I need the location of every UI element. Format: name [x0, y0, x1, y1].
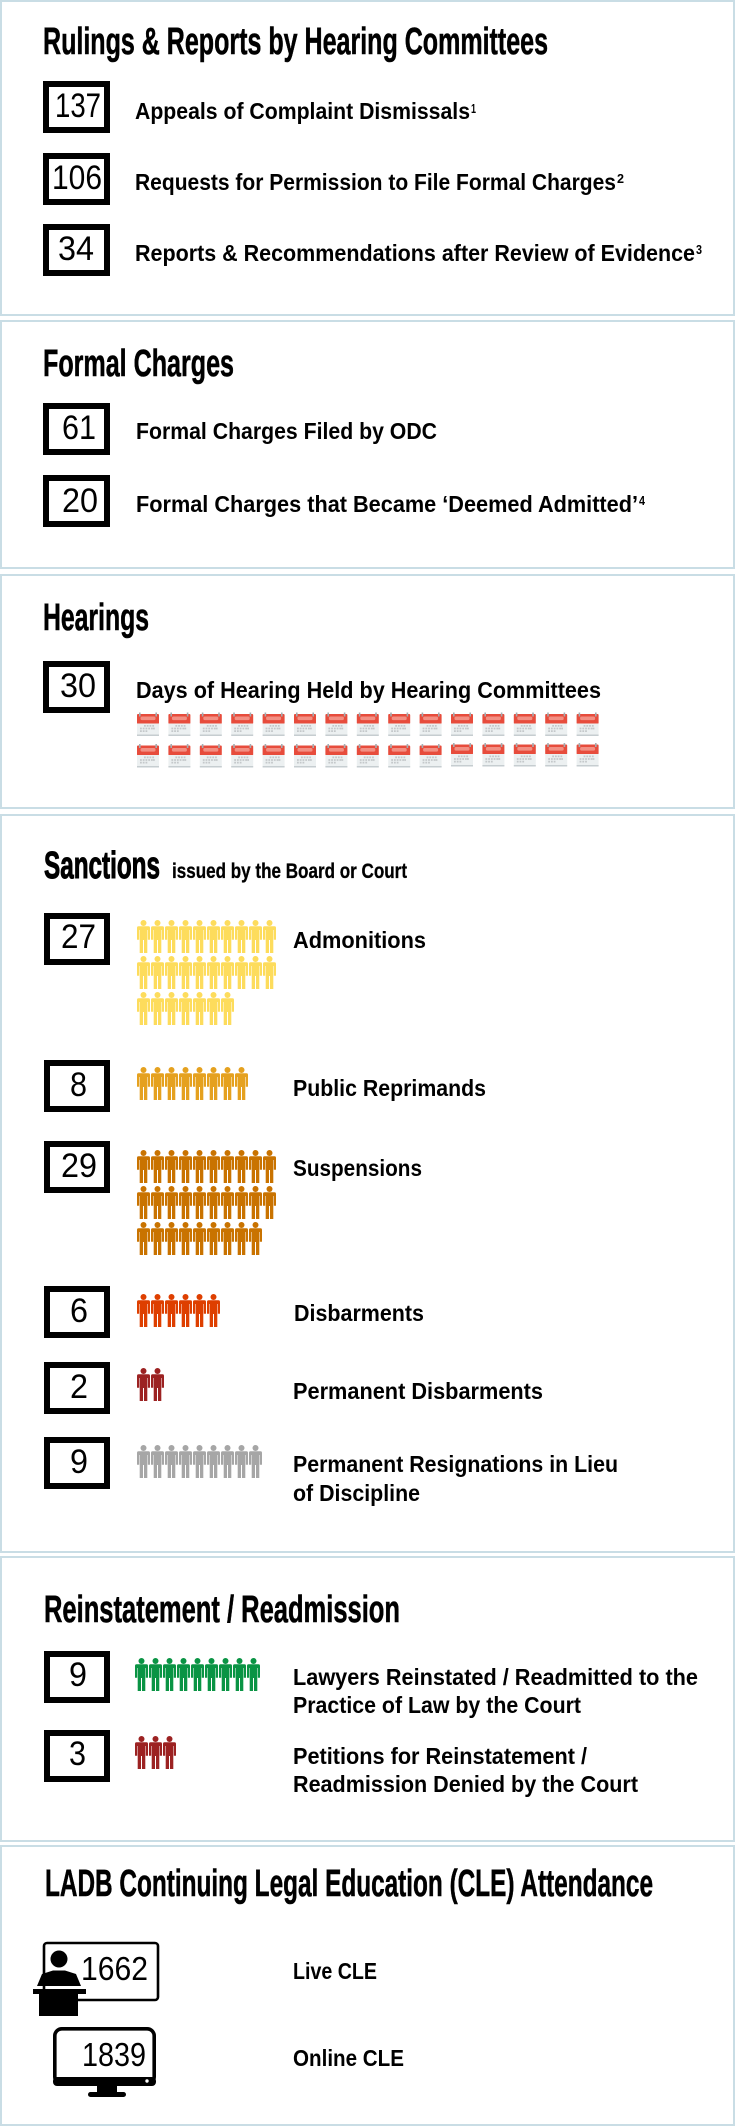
- stat: 34 reports: 34: [58, 230, 94, 268]
- stat: 6 disbarments: [47, 1289, 424, 1335]
- icon: presentation screen with live count: [44, 1943, 158, 2000]
- label: live CLE: Live CLE: [293, 1958, 377, 1984]
- pictogram: 29 orange people: [137, 1150, 276, 1255]
- stat: 27 admonitions: Admonitions: [293, 927, 426, 953]
- pictogram: 8 amber people: [137, 1067, 248, 1100]
- panel: sanctions: [1, 815, 734, 1552]
- stat: 61 formal charges filed: 61: [62, 409, 96, 447]
- stat: 9 lawyers reinstated: [47, 1654, 698, 1718]
- stat: 6 disbarments: 6: [70, 1292, 88, 1330]
- stat: 29 suspensions: 29: [61, 1147, 97, 1185]
- pictogram: 27 yellow people: [137, 920, 276, 1025]
- pictogram: 2 dark red people: [137, 1368, 164, 1401]
- stat: 9 lawyers reinstated: 9: [69, 1656, 87, 1694]
- heading: hearings: Hearings: [43, 597, 149, 639]
- heading: formal charges: Formal Charges: [43, 343, 234, 385]
- stat: 61 formal charges filed: Formal Charges Filed by ODC: [136, 418, 437, 444]
- stat: 34 reports: 3: [696, 242, 702, 257]
- icon: presenter at podium: [33, 1950, 86, 2016]
- stat: 9 lawyers reinstated: Lawyers Reinstated / Readmitted to the: [293, 1664, 698, 1690]
- stat: 2 permanent disbarments: 2: [70, 1368, 88, 1406]
- stat: 106 requests: Requests for Permission to File Formal Charges: [135, 169, 616, 195]
- heading: sanctions: Sanctions: [44, 845, 160, 887]
- stat: 137 appeals: 137: [55, 87, 101, 125]
- stat: 20 deemed admitted: 20: [62, 482, 98, 520]
- stat: 3 petitions denied: [47, 1733, 638, 1797]
- stat: 8 public reprimands: Public Reprimands: [293, 1075, 486, 1101]
- stat: 3 petitions denied: Petitions for Reinstatement /: [293, 1743, 587, 1769]
- pictogram: 9 green people: [135, 1658, 260, 1691]
- stat: 20 deemed admitted: [46, 478, 646, 524]
- stat: 34 reports: [46, 227, 702, 273]
- stat: 3 petitions denied: Readmission Denied by the Court: [293, 1771, 638, 1797]
- stat: 34 reports: Reports & Recommendations after Review of Evidence: [135, 240, 695, 266]
- stat: 6 disbarments: Disbarments: [294, 1300, 424, 1326]
- stat: 137 appeals: Appeals of Complaint Dismissals: [135, 98, 470, 124]
- stat: 29 suspensions: Suspensions: [293, 1155, 422, 1181]
- stat: 9 lawyers reinstated: Practice of Law by the Court: [293, 1692, 581, 1718]
- heading: sanctions: issued by the Board or Court: [172, 860, 407, 883]
- stat: 9 permanent resignations: Permanent Resignations in Lieu: [293, 1451, 618, 1477]
- stat: 106 requests: 2: [617, 171, 624, 186]
- stat: 3 petitions denied: 3: [69, 1735, 86, 1773]
- icon: presentation screen with live count: 1662: [81, 1950, 148, 1987]
- stat: 2 permanent disbarments: [47, 1365, 543, 1411]
- pictogram: 9 grey people: [137, 1445, 262, 1478]
- panel: hearings: [1, 575, 734, 808]
- panel: CLE attendance: [1, 1846, 734, 2125]
- stat: 29 suspensions: [47, 1144, 422, 1190]
- pictogram: 3 dark red people: [135, 1736, 176, 1769]
- stat: 8 public reprimands: 8: [70, 1066, 87, 1104]
- stat: 27 admonitions: 27: [61, 918, 96, 956]
- stat: 30 days of hearing: 30: [60, 667, 96, 705]
- panel: rulings and reports: [1, 1, 734, 315]
- pictogram: 6 red-orange people: [137, 1294, 220, 1327]
- stat: 106 requests: 106: [52, 159, 102, 197]
- heading: sanctions: [44, 845, 407, 887]
- stat: 137 appeals: [46, 84, 476, 130]
- icon: monitor with online count: [53, 2029, 156, 2097]
- stat: 2 permanent disbarments: Permanent Disbarments: [293, 1378, 543, 1404]
- stat: 20 deemed admitted: 4: [639, 493, 646, 508]
- stat: 30 days of hearing: Days of Hearing Held by Hearing Committees: [136, 677, 601, 703]
- stat: 9 permanent resignations: of Discipline: [293, 1480, 420, 1506]
- stat: 27 admonitions: [47, 916, 426, 962]
- stat: 9 permanent resignations: 9: [70, 1443, 88, 1481]
- stat: 61 formal charges filed: [46, 406, 437, 452]
- stat: 9 permanent resignations: [47, 1440, 618, 1506]
- panel: reinstatement and readmission: [1, 1557, 734, 1841]
- stat: 137 appeals: 1: [471, 101, 476, 116]
- stat: 106 requests: [46, 156, 624, 202]
- stat: 30 days of hearing: [46, 664, 601, 710]
- stat: 8 public reprimands: [47, 1063, 486, 1109]
- heading: reinstatement and readmission: Reinstatement / Readmission: [44, 1589, 400, 1631]
- panel: formal charges: [1, 321, 734, 568]
- icons: 30 calendars: [137, 712, 599, 768]
- icon: monitor with online count: 1839: [82, 2036, 146, 2073]
- label: online CLE: Online CLE: [293, 2045, 404, 2071]
- stat: 20 deemed admitted: Formal Charges that Became ‘Deemed Admitted’: [136, 491, 638, 517]
